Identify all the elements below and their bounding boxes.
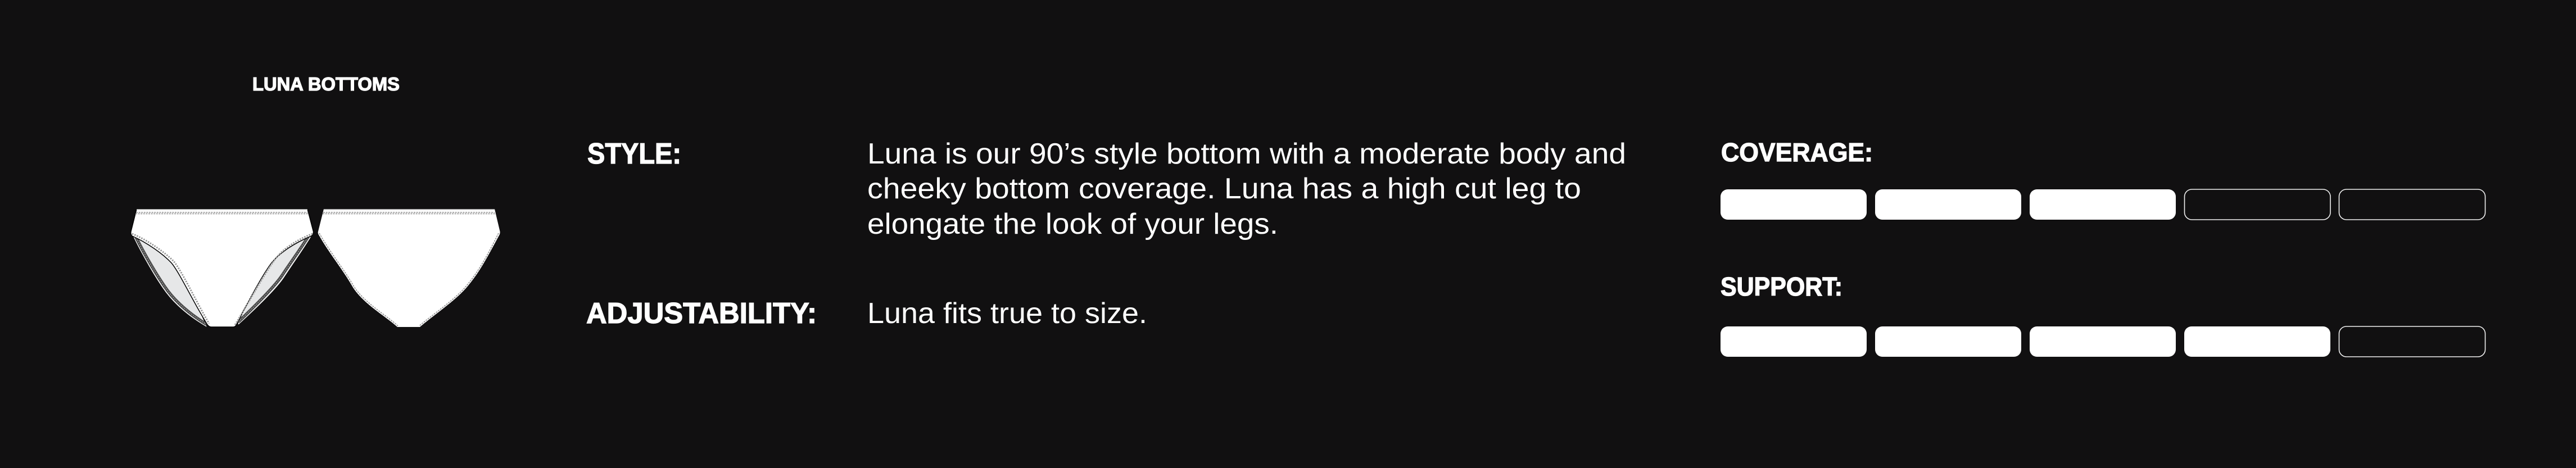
title: LUNA BOTTOMS bbox=[252, 74, 400, 94]
support rating bar: 4 of 5 bbox=[1721, 326, 2486, 357]
adjustability description: Luna fits true to size. bbox=[867, 297, 1147, 330]
coverage label: COVERAGE: bbox=[1721, 138, 1873, 167]
front body panel bbox=[131, 209, 314, 327]
style description: Luna is our 90’s style bottom with a moderate body and bbox=[867, 138, 1626, 170]
style description: elongate the look of your legs. bbox=[867, 208, 1278, 240]
illustration: back view of bottoms bbox=[318, 209, 500, 327]
illustration: front view of bottoms bbox=[131, 209, 314, 327]
support label: SUPPORT: bbox=[1721, 272, 1842, 301]
right gusset lining bbox=[238, 237, 310, 324]
style description: cheeky bottom coverage. Luna has a high cut leg to bbox=[867, 172, 1581, 205]
style description bbox=[867, 138, 1626, 240]
adjustability label: ADJUSTABILITY: bbox=[586, 297, 817, 330]
coverage rating bar: 3 of 5 bbox=[1721, 189, 2486, 220]
left gusset lining bbox=[134, 237, 206, 326]
style label: STYLE: bbox=[587, 138, 681, 170]
